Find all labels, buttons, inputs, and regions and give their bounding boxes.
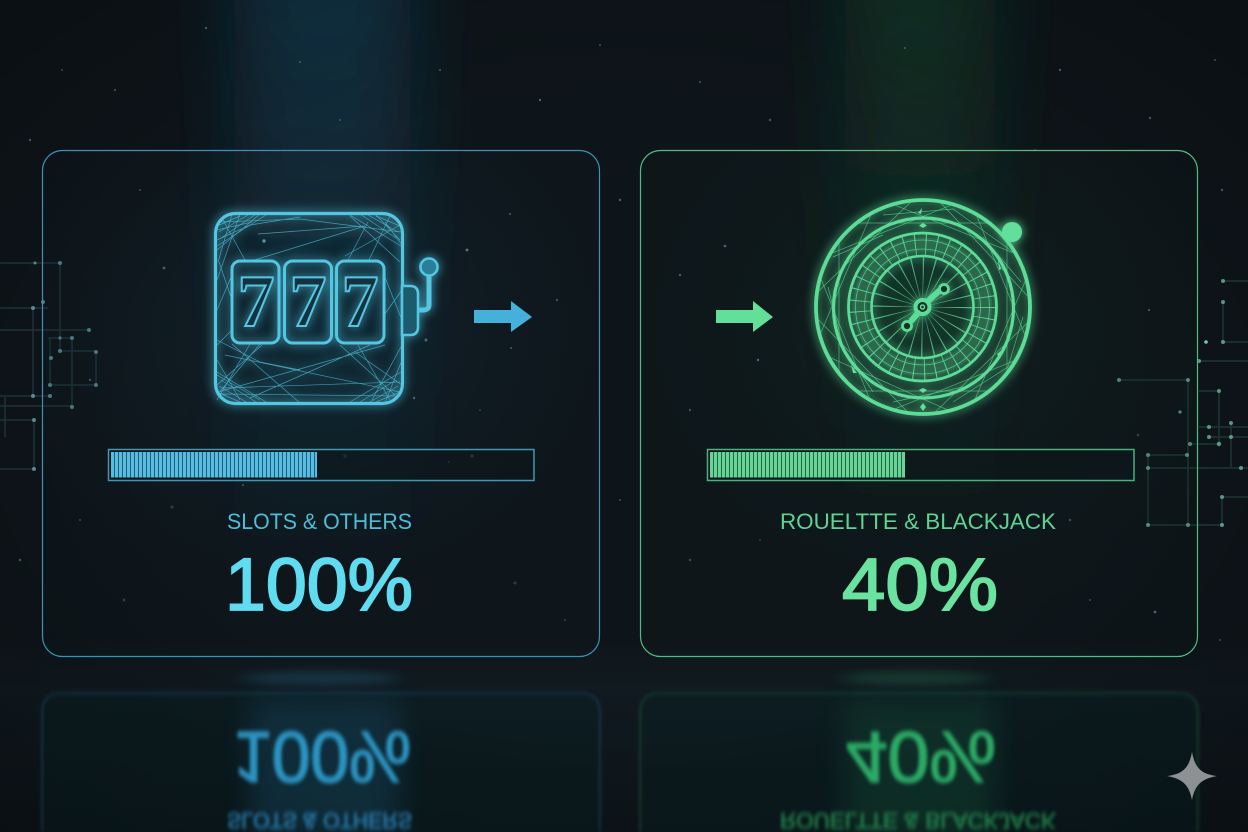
panel frame right [640, 150, 1198, 656]
panel: slots and others [42, 150, 600, 656]
value 40 percent: 40% [842, 543, 998, 626]
arrow blue [474, 301, 532, 332]
progress bar left [108, 450, 534, 480]
panel frame left [42, 150, 600, 656]
floating particles [19, 27, 1223, 641]
floor reflection right [640, 671, 1198, 832]
roulette ball [1002, 222, 1022, 242]
wheel spokes [898, 282, 948, 332]
floor reflection left [42, 671, 600, 832]
icon: sparkle watermark [1167, 752, 1217, 800]
value 100 percent: 100% [225, 543, 413, 626]
progress bar right [708, 450, 1134, 480]
icon: slot machine [216, 214, 438, 404]
label slots: SLOTS & OTHERS [227, 509, 412, 534]
circuit traces left [0, 261, 98, 471]
wheel hub and pointer [902, 284, 948, 330]
reflected value 100 percent: 100% [233, 716, 411, 796]
arrow green [716, 301, 773, 332]
slot reels [232, 261, 384, 343]
panel: roulette and blackjack [640, 150, 1198, 656]
slot sevens: 7 [342, 261, 378, 343]
wheel rim mesh [817, 201, 1029, 413]
slot sevens [238, 261, 378, 343]
slot sevens: 7 [238, 261, 274, 343]
slot sevens: 7 [290, 261, 326, 343]
circuit traces right [1117, 279, 1248, 527]
slot lever [402, 258, 438, 335]
icon: roulette wheel [816, 200, 1030, 414]
wheel diamonds [851, 208, 1002, 411]
wheel pocket ring [848, 233, 996, 381]
reflected value 40 percent: 40% [846, 716, 996, 796]
label roulette: ROUELTTE & BLACKJACK [780, 509, 1056, 534]
